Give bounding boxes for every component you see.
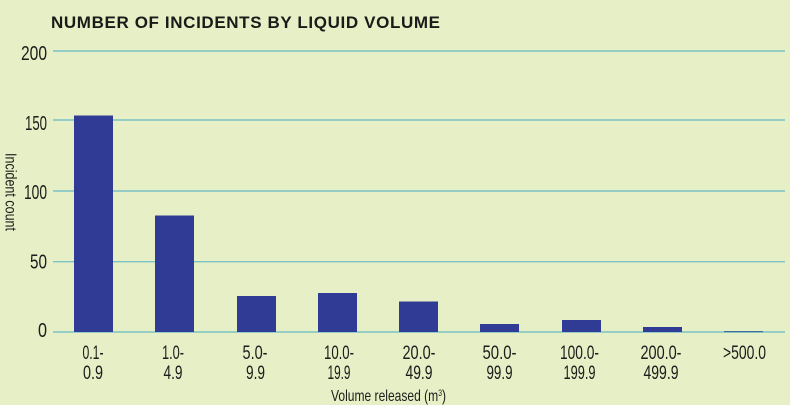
x axis category labels: 49.9 [406, 362, 432, 384]
x axis title: 3 [438, 388, 442, 398]
x axis category labels: 20.0- [402, 342, 436, 364]
x axis category labels: 4.9 [164, 362, 182, 384]
x axis category labels: 0.1- [82, 342, 104, 364]
x axis category labels: 19.9 [328, 362, 350, 384]
x axis category labels: 50.0- [482, 342, 516, 364]
y axis tick labels [21, 43, 47, 342]
x axis category labels: 499.9 [644, 362, 678, 384]
x axis category labels: 10.0- [324, 342, 354, 364]
title: NUMBER OF INCIDENTS BY LIQUID VOLUME [51, 13, 440, 32]
x axis category labels: 100.0- [560, 342, 599, 364]
y axis tick labels: 150 [25, 113, 47, 135]
y axis title: Incident count [2, 153, 18, 231]
x axis category labels: >500.0 [723, 342, 766, 364]
x axis category labels [82, 342, 766, 384]
x axis category labels: 0.9 [83, 362, 103, 384]
y axis tick labels: 100 [24, 182, 47, 204]
x axis category labels: 199.9 [564, 362, 596, 384]
y axis tick labels: 50 [30, 252, 47, 274]
x axis category labels: 200.0- [640, 342, 682, 364]
x axis category labels: 9.9 [246, 362, 265, 384]
x axis category labels: 99.9 [486, 362, 512, 384]
bar chart [74, 116, 763, 332]
x axis category labels: 5.0- [242, 342, 268, 364]
x axis category labels: 1.0- [162, 342, 184, 364]
y axis tick labels: 0 [38, 320, 47, 342]
x axis title: Volume released (m [331, 388, 473, 405]
x axis title: ) [442, 388, 446, 405]
y axis tick labels: 200 [21, 43, 47, 65]
